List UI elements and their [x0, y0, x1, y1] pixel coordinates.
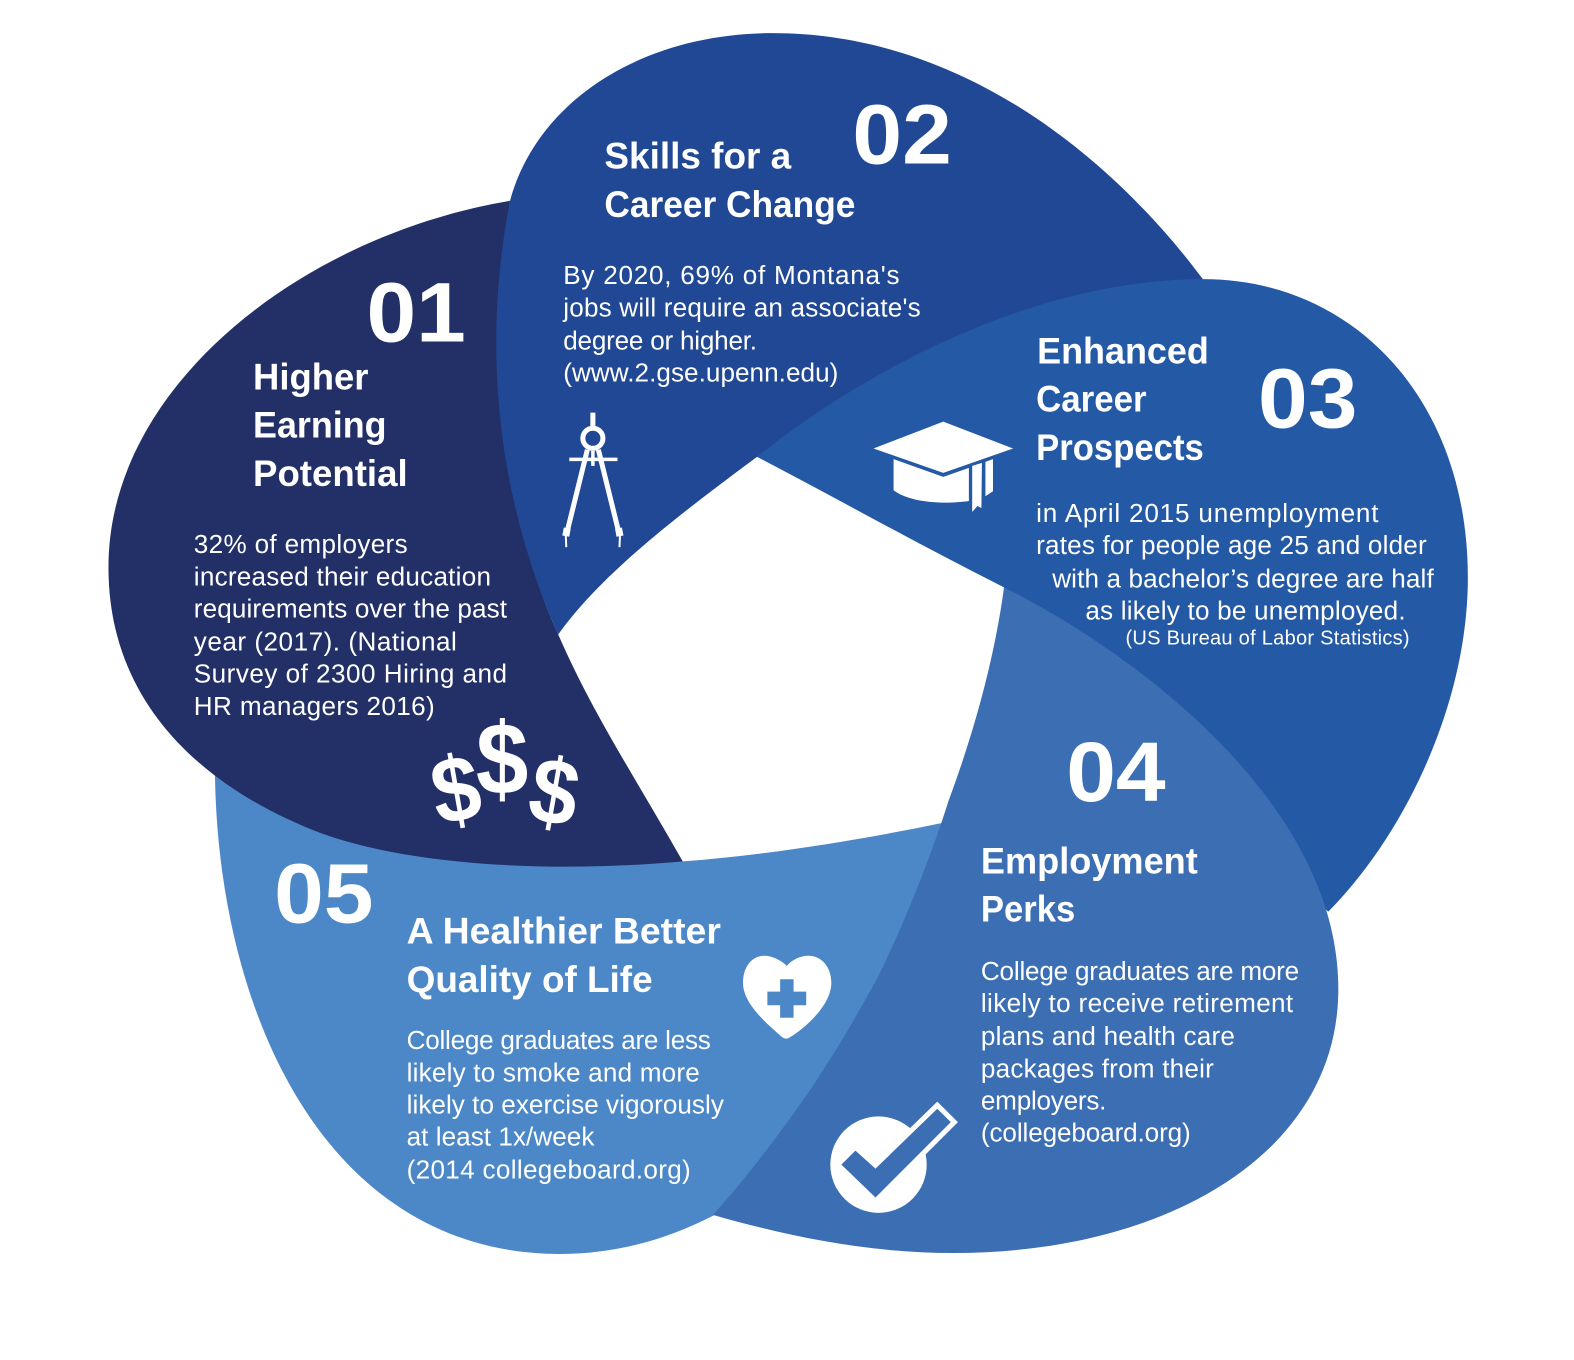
body text 01: requirements over the past	[194, 593, 508, 623]
body text 01: increased their education	[194, 561, 491, 591]
body text 04: likely to receive retirement	[981, 988, 1294, 1018]
panel: 02 skills for a career change	[496, 33, 1203, 635]
body text 01: 32% of employers	[194, 529, 408, 559]
petal 02	[496, 33, 1203, 635]
heading 05: Quality of Life	[407, 958, 653, 1000]
body text 05: likely to smoke and more	[407, 1057, 700, 1087]
body text 02: jobs will require an associate's	[562, 292, 921, 322]
heading 04	[981, 839, 1198, 930]
number 01: 01	[366, 265, 466, 359]
body text 05: likely to exercise vigorously	[407, 1089, 724, 1119]
body text 03: in April 2015 unemployment	[1036, 498, 1379, 528]
heading 03	[1036, 329, 1209, 468]
heading 01: Earning	[253, 404, 387, 446]
heading 01	[253, 356, 408, 494]
icon: graduation cap	[873, 422, 1013, 512]
icon: check mark in circle	[830, 1109, 951, 1213]
icon: heart with cross	[743, 956, 831, 1039]
body text 04: packages from their	[981, 1053, 1214, 1083]
body text 01: Survey of 2300 Hiring and	[194, 659, 507, 689]
number 03: 03	[1258, 352, 1357, 446]
body text 01: HR managers 2016)	[194, 691, 435, 721]
body text 05	[407, 1025, 724, 1185]
heading 05	[407, 910, 721, 1000]
body text 04: employers.	[981, 1085, 1106, 1115]
heading 02: Career Change	[604, 183, 855, 225]
icon: drafting compass	[566, 413, 620, 547]
heading 01: Potential	[253, 452, 408, 494]
panel: 01 higher earning potential	[108, 201, 683, 867]
heading 03: Career	[1036, 378, 1147, 420]
body text 04: (collegeboard.org)	[981, 1118, 1191, 1148]
petal 05	[215, 763, 964, 1254]
body text 02: degree or higher.	[563, 325, 757, 355]
petal 04	[713, 587, 1338, 1253]
body text 01: year (2017). (National	[194, 627, 457, 657]
body text 02: By 2020, 69% of Montana's	[563, 260, 900, 290]
body text 03	[1036, 498, 1434, 650]
panel: 03 enhanced career prospects	[757, 279, 1468, 912]
body text 01	[194, 529, 508, 721]
body text 04	[981, 956, 1299, 1148]
heading 04: Perks	[981, 888, 1075, 930]
body text 03: as likely to be unemployed.	[1085, 595, 1406, 625]
heading 05: A Healthier Better	[407, 910, 721, 952]
petal 01	[108, 201, 683, 867]
number 02: 02	[852, 88, 952, 182]
body text 02: (www.2.gse.upenn.edu)	[563, 358, 838, 388]
heading 01: Higher	[253, 356, 368, 398]
body text 03: with a bachelor’s degree are half	[1051, 563, 1434, 593]
icon: dollar signs	[423, 702, 587, 848]
body text 03: (US Bureau of Labor Statistics)	[1125, 628, 1410, 650]
body text 02	[562, 260, 921, 388]
number 05: 05	[274, 847, 374, 941]
heading 02: Skills for a	[604, 135, 792, 177]
body text 05: at least 1x/week	[407, 1122, 595, 1152]
icon: dollar signs: $	[476, 702, 528, 816]
body text 03: rates for people age 25 and older	[1036, 530, 1427, 560]
body text 04: plans and health care	[981, 1021, 1235, 1051]
heading 03: Prospects	[1036, 426, 1204, 468]
heading 03: Enhanced	[1037, 329, 1209, 371]
heading 04: Employment	[981, 839, 1198, 881]
icon: dollar signs: $	[423, 735, 489, 846]
heading 02	[604, 135, 855, 225]
panel: 04 employment perks	[713, 587, 1338, 1253]
icon: dollar signs: $	[522, 737, 587, 848]
body text 05: (2014 collegeboard.org)	[407, 1155, 691, 1185]
number 04: 04	[1066, 725, 1166, 819]
body text 05: College graduates are less	[407, 1025, 711, 1055]
panel: 05 healthier better quality of life	[215, 763, 964, 1254]
body text 04: College graduates are more	[981, 956, 1299, 986]
petal 03	[757, 279, 1468, 912]
